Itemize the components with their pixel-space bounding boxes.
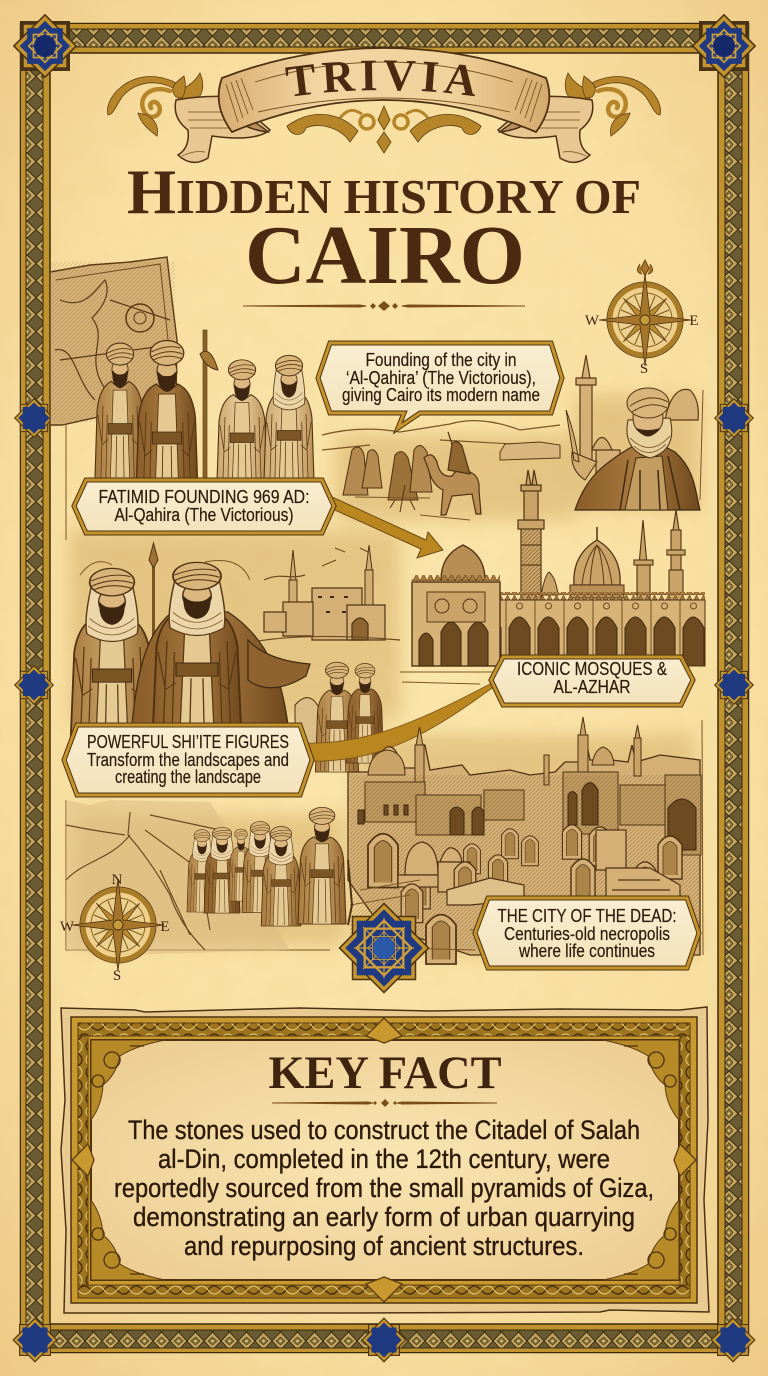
illustration: four Fatimid founders (94, 330, 314, 512)
key fact body text (114, 1115, 654, 1261)
callout: Fatimid founding 969 AD: Al-Qahira (The Victorious) (114, 505, 294, 525)
ribbon inner hatching (226, 62, 542, 122)
ribbed dome (570, 527, 624, 598)
ribbon banner with title (107, 47, 661, 164)
frame star: left upper (15, 399, 53, 437)
illustration: scholar with quill and minarets (566, 355, 700, 510)
front dome (441, 545, 485, 580)
compass rose top right (585, 260, 699, 377)
illustration: desert caravan (322, 421, 560, 520)
distant city blocks (365, 772, 701, 855)
minaret right (634, 510, 685, 615)
fortress minarets (289, 545, 373, 630)
frame star: right lower (715, 666, 753, 704)
quill and hand (566, 410, 597, 480)
callout: Fatimid founding 969 AD (74, 480, 334, 533)
callout: the city of the dead: Centuries-old necropolis (504, 924, 670, 944)
corner ornament: bottom right (603, 1200, 679, 1280)
parchment map lower left (66, 800, 290, 955)
corner ornament: top left (91, 1040, 165, 1120)
heading: Hidden History of: HIDDEN HISTORY OF (127, 156, 641, 227)
frame star: right upper (715, 399, 753, 437)
foreground tombstones (401, 884, 423, 923)
illustration panel edge lines (66, 390, 703, 955)
illustration: City of the Dead (348, 717, 701, 964)
callout: Fatimid founding 969 AD: FATIMID FOUNDING 969 AD: (98, 487, 310, 507)
founder figure 2 (136, 340, 198, 512)
callout: iconic mosques and Al-Azhar: AL-AZHAR (554, 677, 631, 697)
illustration: powerful Shi'ite leaders (70, 543, 384, 772)
compass rose bottom left: W (60, 919, 75, 935)
compass letters top: W (585, 313, 600, 329)
key fact body text: The stones used to construct the Citadel of Salah (128, 1115, 640, 1145)
ribbon main arc (219, 48, 549, 132)
callout: founding of the city: ‘Al-Qahira’ (The Victorious), (346, 368, 536, 388)
inner panel (91, 1040, 679, 1280)
fortress block (264, 588, 385, 640)
standard with pennant (200, 330, 218, 480)
panel: key fact (61, 1007, 709, 1313)
heading: Cairo: CAIRO (245, 209, 525, 302)
skyline buildings (348, 735, 700, 955)
graves and tombs (368, 825, 682, 909)
corner ornament: top right (603, 1040, 679, 1120)
callout: powerful Shi'ite figures: creating the landscape (115, 767, 261, 787)
front portal block (412, 575, 500, 666)
city hatching (350, 775, 700, 950)
founder figure 3 (216, 360, 268, 497)
listeners (295, 662, 384, 772)
crenellated arcade (500, 592, 705, 666)
torn parchment backing (61, 1007, 709, 1313)
right scroll flourish (565, 73, 660, 136)
camel with rider (424, 432, 481, 515)
title arc path text (255, 90, 513, 103)
ribbon tails (175, 96, 593, 162)
callout: iconic mosques and Al-Azhar: ICONIC MOSQUES & (517, 659, 667, 679)
callout: powerful Shi'ite figures: Transform the landscapes and (87, 750, 289, 770)
dark arches (358, 782, 696, 850)
frame corner star: top left (14, 15, 76, 77)
callout: the city of the dead (475, 898, 699, 968)
frame star: bottom centre (362, 1318, 406, 1362)
key fact body text: reportedly sourced from the small pyramids of Giza, (114, 1173, 654, 1203)
founder figure 1 (94, 343, 146, 494)
compass rose top right: E (689, 313, 699, 329)
central gold flourish (287, 106, 481, 153)
callout: the city of the dead: THE CITY OF THE DEAD: (498, 906, 676, 926)
frame star: bottom left (13, 1318, 57, 1362)
callout: founding of the city (318, 343, 562, 428)
key fact body text: and repurposing of ancient structures. (184, 1231, 584, 1261)
leader right robe (132, 612, 288, 725)
illustration: desert fortress with minarets (80, 545, 400, 642)
leader right (152, 562, 242, 751)
frame corner star: top right (693, 15, 755, 77)
compass rose bottom left: S (113, 968, 121, 984)
distant minaret and domes (576, 355, 698, 480)
small dome (541, 572, 558, 595)
callout: powerful Shi'ite figures (64, 725, 312, 795)
callout: founding of the city: Founding of the city in (366, 350, 516, 370)
callout: iconic mosques and Al-Azhar (491, 657, 693, 705)
key fact body text: demonstrating an early form of urban quarrying (133, 1202, 635, 1232)
caravan walkers (343, 445, 432, 512)
procession figures (187, 807, 352, 926)
scholar head and turban (627, 388, 672, 458)
tall central minaret (518, 470, 544, 600)
key fact divider (272, 1099, 497, 1107)
compass letters bottom: N (112, 872, 123, 888)
callout: the city of the dead: where life continues (518, 941, 655, 961)
frame star: left lower (15, 666, 53, 704)
compass rose bottom left: E (160, 919, 170, 935)
frame star: bottom right (711, 1318, 755, 1362)
ornate gold frame (71, 1017, 697, 1303)
title: TRIVIA: TRIVIA (285, 60, 475, 96)
illustration: map and procession (66, 800, 352, 955)
gold arrow: founding to mosques (326, 497, 443, 558)
frame mid diamonds (72, 1018, 696, 1302)
curved connector band (305, 683, 492, 761)
sepia washes behind illustrations (70, 395, 700, 955)
geometric blue star ornament (339, 903, 429, 993)
founder figure 4 (264, 355, 314, 496)
key fact body text: al-Din, completed in the 12th century, were (158, 1144, 610, 1174)
leader left (70, 568, 154, 757)
illustration: mosque complex and Al-Azhar (400, 470, 705, 684)
illustration: old map top left (50, 257, 177, 425)
outstretched arm (248, 640, 310, 688)
key fact heading: KEY FACT (268, 1047, 502, 1099)
domed tombs (398, 830, 680, 905)
callout: founding of the city: giving Cairo its modern name (342, 385, 540, 405)
corner ornament: bottom left (91, 1200, 165, 1280)
compass rose bottom left (60, 872, 170, 984)
scholar robe (575, 440, 700, 510)
compass rose top right: S (640, 361, 648, 377)
left scroll flourish (108, 73, 203, 136)
dome and minarets on the skyline (368, 717, 641, 785)
spear (149, 543, 158, 725)
flat tomb (447, 878, 524, 905)
title divider (243, 301, 525, 311)
near headstone (426, 915, 456, 964)
callout: powerful Shi'ite figures: POWERFUL SHI’ITE FIGURES (87, 732, 289, 752)
